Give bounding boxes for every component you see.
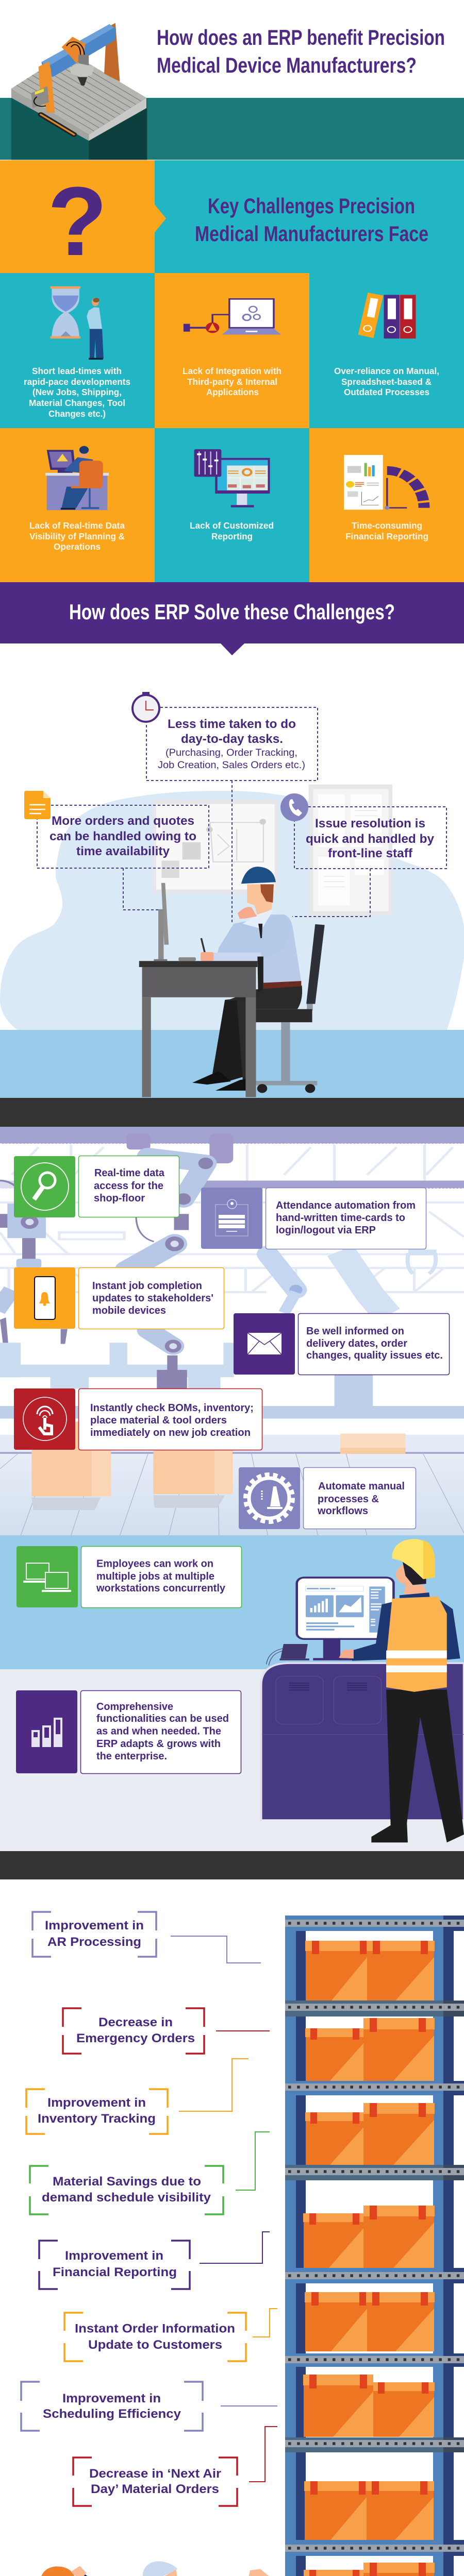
benefit: AR processing: Improvement in xyxy=(45,1919,144,1933)
card: job completion updates xyxy=(14,1267,224,1329)
card: automate processes xyxy=(239,1467,416,1529)
illustration: warehouse shelving with boxes xyxy=(285,1916,464,2576)
card: comprehensive functionalities: Comprehensive xyxy=(96,1701,173,1713)
card: real-time data: access for the xyxy=(94,1180,163,1192)
icon: envelope xyxy=(247,1333,281,1354)
callout: less time: day-to-day tasks. xyxy=(181,732,283,746)
benefit: next air day orders: Decrease in ‘Next Air xyxy=(89,2467,221,2481)
card: delivery information xyxy=(234,1313,450,1375)
icon: stopwatch xyxy=(132,692,159,722)
text: short lead-times: Changes etc.) xyxy=(48,409,106,419)
text: short lead-times: (New Jobs, Shipping, xyxy=(32,387,122,397)
text: real-time visibility xyxy=(29,520,125,552)
callout: more orders: can be handled owing to xyxy=(49,829,196,843)
text: short lead-times: Short lead-times with xyxy=(32,366,122,376)
card: real-time data: Real-time data xyxy=(94,1167,165,1179)
callout: issue resolution xyxy=(280,793,446,869)
icon: gear with robot xyxy=(245,1475,293,1522)
wall boards xyxy=(153,784,392,916)
card: multiple workstations: Employees can work on xyxy=(96,1558,213,1569)
card: multiple workstations: multiple jobs at multiple xyxy=(96,1571,214,1582)
card: automate processes: processes & xyxy=(318,1494,379,1505)
callout: less time xyxy=(132,692,318,781)
icon: magnifier xyxy=(21,1163,69,1210)
text: financial reporting: Financial Reporting xyxy=(345,531,428,541)
benefit: inventory tracking: Inventory Tracking xyxy=(38,2112,156,2126)
text: lack of integration: Lack of Integration with xyxy=(183,366,281,376)
text: real-time visibility: Operations xyxy=(54,541,101,552)
panel: office worker scene xyxy=(0,692,464,1127)
card: check BOMs: Instantly check BOMs, inventory; xyxy=(90,1402,254,1414)
callout: more orders: time availability xyxy=(76,844,170,858)
card: delivery information: changes, quality issues etc. xyxy=(306,1350,443,1361)
icon: laptop with broken plug xyxy=(184,299,281,335)
text: short lead-times: rapid-pace developments xyxy=(24,377,130,387)
card: multiple workstations xyxy=(16,1546,241,1607)
card: attendance automation: hand-written time-cards to xyxy=(276,1212,405,1224)
benefit: material savings xyxy=(30,2132,270,2214)
shelf beams xyxy=(285,1916,464,2576)
engineer in shirt and tie xyxy=(136,2561,270,2576)
illustration: CNC milling machine xyxy=(11,23,147,160)
callout: issue resolution: front-line staff xyxy=(328,846,413,860)
card: automate processes: workflows xyxy=(317,1505,368,1517)
benefit: order information: Instant Order Information xyxy=(75,2321,235,2336)
benefit: inventory tracking xyxy=(26,2059,248,2134)
card: attendance automation xyxy=(201,1188,426,1249)
callout: issue resolution: quick and handled by xyxy=(306,832,435,846)
card: attendance automation: login/logout via ERP xyxy=(276,1225,376,1236)
card: check BOMs: immediately on new job creation xyxy=(90,1427,251,1438)
text: over-reliance: Outdated Processes xyxy=(344,387,429,397)
benefit: order information: Update to Customers xyxy=(88,2338,222,2352)
panel: challenge grid xyxy=(0,273,464,582)
benefit: material savings: Material Savings due to xyxy=(53,2175,201,2189)
benefit: financial reporting: Improvement in xyxy=(65,2249,163,2263)
icon: binders xyxy=(358,293,416,338)
text: lack of integration xyxy=(183,366,281,397)
card: comprehensive functionalities: functionalities can be used xyxy=(96,1713,229,1724)
icon: hourglass and man xyxy=(51,286,104,360)
conveyor floor xyxy=(0,1454,464,1535)
icon: person at computer with warning xyxy=(45,446,109,510)
benefit: order information xyxy=(64,2309,277,2361)
callout: more orders: More orders and quotes xyxy=(52,814,194,828)
card: check BOMs xyxy=(14,1388,262,1450)
card: delivery information: Be well informed on xyxy=(306,1326,404,1337)
card: job completion updates: Instant job completion xyxy=(92,1280,202,1292)
orange boxes xyxy=(303,1941,435,2576)
icon: ID badge xyxy=(216,1199,248,1236)
card: multiple workstations: workstations concurrently xyxy=(96,1583,226,1594)
benefit: next air day orders: Day’ Material Orders xyxy=(91,2482,219,2496)
text: over-reliance: Over-reliance on Manual, xyxy=(334,366,439,376)
connector lines xyxy=(123,781,370,922)
worker in orange vest xyxy=(3,2566,125,2576)
text: customized reporting: Reporting xyxy=(211,531,253,541)
benefit: AR processing xyxy=(32,1912,261,1963)
illustration: worker at kiosk xyxy=(261,1539,464,1842)
benefit: scheduling efficiency xyxy=(21,2382,277,2431)
icon: financial report and gauge xyxy=(344,455,424,510)
callout: issue resolution: Issue resolution is xyxy=(315,817,425,831)
icon: growing bars xyxy=(31,1718,62,1747)
card: check BOMs: place material & tool orders xyxy=(90,1415,227,1426)
text: customized reporting xyxy=(190,520,274,541)
benefit: scheduling efficiency: Scheduling Efficiency xyxy=(43,2407,181,2421)
benefit: emergency orders: Emergency Orders xyxy=(76,2031,195,2045)
title xyxy=(157,25,445,77)
text: lack of integration: Third-party & Internal xyxy=(187,377,277,387)
benefit: emergency orders: Decrease in xyxy=(98,2015,173,2029)
panel: hero header xyxy=(0,23,464,160)
benefit: AR processing: AR Processing xyxy=(47,1935,141,1949)
card: comprehensive functionalities xyxy=(16,1690,241,1773)
text: real-time visibility: Visibility of Planning & xyxy=(29,531,125,541)
icon: question mark: ? xyxy=(47,167,107,276)
text: over-reliance xyxy=(334,366,439,397)
icon: two laptops xyxy=(23,1563,71,1592)
text: customized reporting: Lack of Customized xyxy=(190,520,274,531)
benefit: inventory tracking: Improvement in xyxy=(47,2096,146,2110)
card: job completion updates: updates to stakeholders' xyxy=(92,1293,213,1304)
benefit: financial reporting xyxy=(39,2232,270,2289)
text: financial reporting: Time-consuming xyxy=(352,520,422,531)
benefit: scheduling efficiency: Improvement in xyxy=(62,2392,161,2405)
card: job completion updates: mobile devices xyxy=(92,1305,166,1316)
text: real-time visibility: Lack of Real-time Data xyxy=(29,520,125,531)
card: automate processes: Automate manual xyxy=(318,1481,405,1492)
benefit: material savings: demand schedule visibility xyxy=(42,2191,211,2205)
card: real-time data xyxy=(14,1156,179,1217)
heading: key challenges xyxy=(195,194,428,246)
icon: phone xyxy=(280,793,308,821)
illustration: two engineers xyxy=(3,2561,270,2576)
card: delivery information: delivery dates, order xyxy=(306,1338,407,1349)
card: comprehensive functionalities: ERP adapts & grows with xyxy=(96,1738,221,1750)
illustration: factory robots and conveyors xyxy=(0,1133,464,1467)
icon: phone with bell xyxy=(35,1277,55,1319)
icon: custom report dashboard xyxy=(194,449,270,507)
icon: document xyxy=(24,791,51,819)
card: comprehensive functionalities: as and when needed. The xyxy=(96,1726,221,1737)
panel: key challenges heading xyxy=(0,160,464,276)
card: comprehensive functionalities: the enterprise. xyxy=(96,1751,167,1762)
callout: less time: Job Creation, Sales Orders etc.) xyxy=(158,759,305,771)
panel: factory background xyxy=(0,1127,464,1535)
illustration: man at desk xyxy=(139,867,325,1097)
text: financial reporting xyxy=(345,520,428,541)
floor lines and boxes xyxy=(0,1421,464,1535)
callout: more orders xyxy=(24,791,209,868)
card: real-time data: shop-floor xyxy=(94,1193,145,1204)
card: attendance automation: Attendance automation from xyxy=(276,1200,416,1211)
icon: touch xyxy=(23,1397,67,1440)
benefit: financial reporting: Financial Reporting xyxy=(53,2265,177,2279)
benefit: next air day orders xyxy=(73,2427,277,2506)
text: over-reliance: Spreadsheet-based & xyxy=(341,377,432,387)
heading band: how does ERP solve xyxy=(0,582,464,655)
text: lack of integration: Applications xyxy=(206,387,259,397)
text: short lead-times: Material Changes, Tool xyxy=(29,398,125,408)
panel: workstation scene xyxy=(0,1535,464,1879)
callout: less time: (Purchasing, Order Tracking, xyxy=(165,747,297,758)
benefit: emergency orders xyxy=(63,2008,270,2054)
text: short lead-times xyxy=(24,366,130,419)
shelf uprights xyxy=(285,1916,454,2576)
callout: less time: Less time taken to do xyxy=(168,717,296,731)
